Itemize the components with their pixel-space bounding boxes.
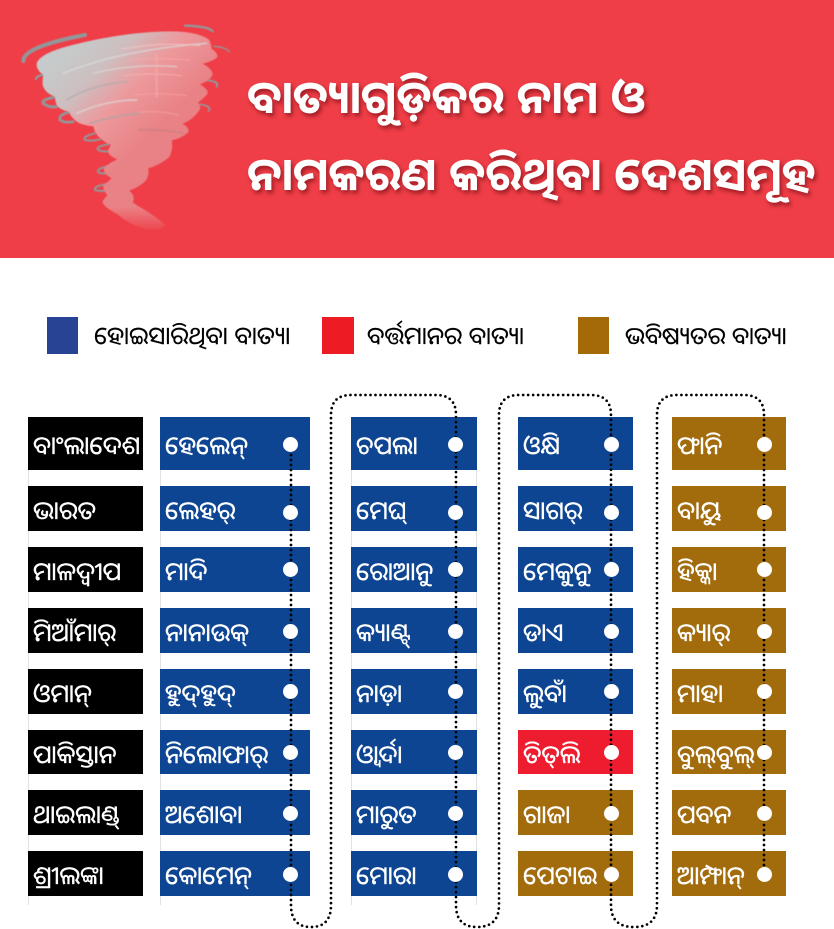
name: Helen (160, 417, 310, 470)
icon: tornado (20, 24, 230, 230)
name: Madi (160, 547, 310, 592)
name: Amphan (672, 851, 786, 896)
name: Helen: ହେଲେନ୍ (165, 432, 248, 460)
name: Roanu: ରୋଆନୁ (356, 558, 433, 586)
name: Hudhud (160, 669, 310, 714)
country: Thailand (28, 790, 143, 835)
name: Kyant (351, 608, 477, 653)
name: Komen (160, 851, 310, 896)
name: Pawan (672, 790, 786, 835)
name: Nada: ନାଡ଼ା (356, 680, 402, 708)
name: Vardah: ଓ୍ୱାର୍ଦା (356, 740, 402, 768)
name: Daye (518, 608, 633, 653)
name: Fani: ଫାନି (677, 432, 722, 460)
name: Luban (518, 669, 633, 714)
legend label: past: ହୋଇସାରିଥିବା ବାତ୍ୟା (94, 323, 290, 350)
name: Roanu (351, 547, 477, 592)
country: Bangladesh: ବାଂଲାଦେଶ (33, 432, 140, 460)
funnel body (37, 31, 217, 230)
header banner (0, 0, 834, 258)
name: Chapala (351, 417, 477, 470)
name: Madi: ମାଦି (165, 558, 207, 586)
name: Vayu (672, 486, 786, 531)
name: Mora: ମୋରା (356, 862, 417, 890)
name: Nilofar (160, 730, 310, 774)
country: Sri Lanka (28, 851, 143, 896)
name: Ockhi (518, 417, 633, 470)
legend label: future: ଭବିଷ୍ୟତର ବାତ୍ୟା (625, 323, 787, 350)
name: Sagar (518, 486, 633, 531)
name: Chapala: ଚପଲା (356, 432, 418, 460)
swirl highlights (63, 43, 207, 133)
name: Bulbul: ବୁଲ୍‌ବୁଲ୍ (677, 740, 755, 768)
name: Lehar: ଲେହର୍ (165, 497, 235, 525)
name: Nilofar: ନିଲୋଫାର୍ (165, 740, 268, 768)
name: Maha (672, 669, 786, 714)
name: Kyant: କ୍ୟାଣ୍ଟ୍ (356, 619, 411, 647)
legend swatch: future (578, 317, 609, 354)
name: Lehar (160, 486, 310, 531)
country: Maldives: ମାଳଦ୍ୱୀପ (33, 558, 121, 586)
name: Maruti: ମାରୁତ (356, 801, 417, 829)
name: Nanauk (160, 608, 310, 653)
country: Pakistan: ପାକିସ୍ତାନ (33, 740, 116, 768)
name: Vardah (351, 730, 477, 774)
country: India: ଭାରତ (33, 497, 96, 525)
name: Megh (351, 486, 477, 531)
name: Ashobaa: ଅଶୋବା (165, 801, 242, 829)
name: Sagar: ସାଗର୍ (523, 497, 583, 525)
name: Ashobaa (160, 790, 310, 835)
name: Nada (351, 669, 477, 714)
name: Megh: ମେଘ୍ (356, 497, 406, 525)
title line 2: ନାମକରଣ କରିଥିବା ଦେଶସମୂହ (247, 149, 816, 200)
legend label: current: ବର୍ତ୍ତମାନର ବାତ୍ୟା (367, 323, 524, 350)
name: Bulbul (672, 730, 786, 774)
name: Nanauk: ନାନାଉକ୍ (165, 619, 249, 647)
country: Pakistan (28, 730, 143, 774)
name: Maruti (351, 790, 477, 835)
name: Hudhud: ହୁଦ୍‌ହୁଦ୍ (165, 680, 236, 708)
name: Pawan: ପବନ (677, 801, 731, 829)
name: Vayu: ବାୟୁ (677, 497, 721, 525)
name: Kyarr (672, 608, 786, 653)
name: Fani (672, 417, 786, 470)
name: Ockhi: ଓକ୍ଷି (523, 432, 560, 460)
name: Hikka: ହିକ୍କା (677, 558, 717, 586)
name: Titli (518, 730, 633, 774)
name: Daye: ଡାଏ (523, 619, 564, 647)
country: Sri Lanka: ଶ୍ରୀଲଙ୍କା (33, 862, 104, 890)
name: Gaja: ଗାଜା (523, 801, 570, 829)
name: Gaja (518, 790, 633, 835)
legend swatch: current (322, 317, 354, 354)
country: Bangladesh (28, 417, 143, 470)
gray swirl marks (23, 26, 229, 191)
country: Maldives (28, 547, 143, 592)
name: Phethai (518, 851, 633, 896)
name: Kyarr: କ୍ୟାର୍ (677, 619, 730, 647)
name: Hikka (672, 547, 786, 592)
legend (47, 317, 787, 354)
country: Oman: ଓମାନ୍ (33, 680, 92, 708)
name: Maha: ମାହା (677, 680, 723, 708)
name: Amphan: ଆମ୍ଫାନ୍ (677, 862, 745, 890)
name: Luban: ଲୁବାଁ (523, 680, 567, 708)
country: Myanmar: ମିଆଁମାର୍ (33, 619, 116, 647)
country: Thailand: ଥାଇଲାଣ୍ଡ୍ (33, 801, 119, 829)
name: Phethai: ପେଟାଇ (523, 862, 597, 890)
title line 1: ବାତ୍ୟାଗୁଡ଼ିକର ନାମ ଓ (247, 72, 646, 123)
country: Myanmar (28, 608, 143, 653)
country: Oman (28, 669, 143, 714)
country: India (28, 486, 143, 531)
legend swatch: past (47, 317, 78, 354)
name: Mekunu: ମେକୁନୁ (523, 558, 591, 586)
name: Komen: କୋମେନ୍ (165, 862, 252, 890)
name: Mekunu (518, 547, 633, 592)
name: Titli: ତିତ୍‌ଲି (523, 740, 581, 768)
name: Mora (351, 851, 477, 896)
